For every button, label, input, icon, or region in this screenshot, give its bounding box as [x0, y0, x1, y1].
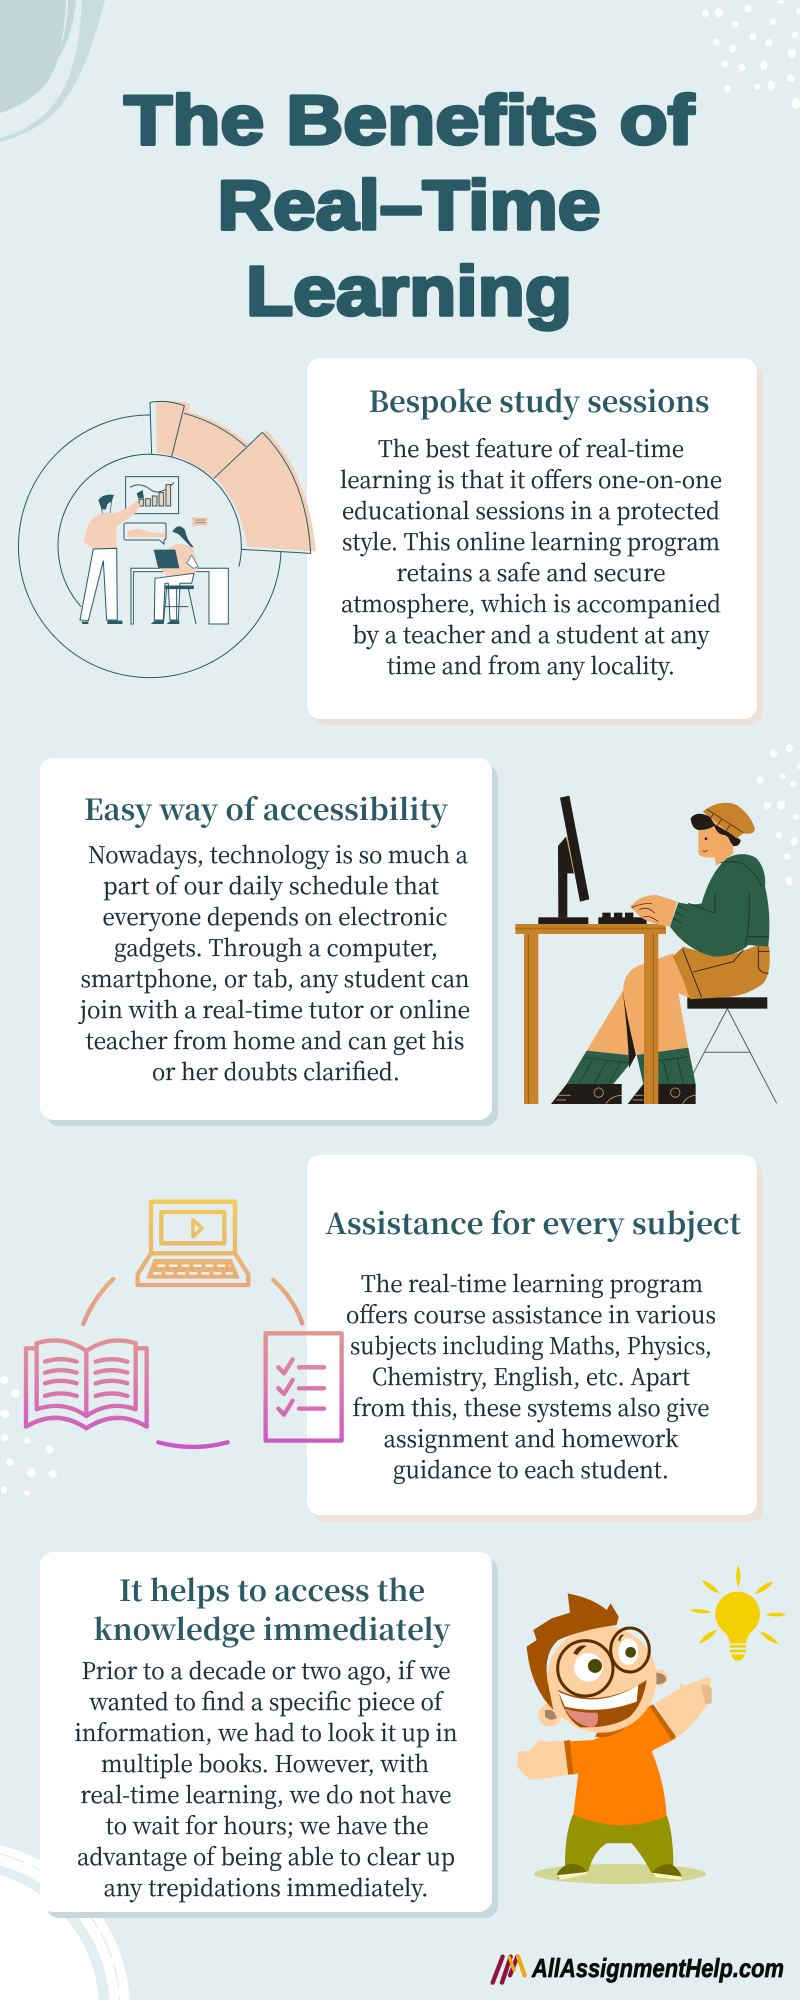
body text: [346, 1266, 716, 1485]
body text: subjects including Maths, Physics,: [350, 1328, 712, 1361]
legs: [551, 953, 696, 1104]
body text: Chemistry, English, etc. Apart: [372, 1359, 691, 1392]
body text: learning is that it offers one-on-one: [340, 462, 722, 495]
body text: to wait for hours; we have the: [106, 1808, 428, 1841]
body text: [74, 1653, 458, 1903]
body text: teacher from home and can get his: [86, 1023, 464, 1056]
heading: [94, 1569, 451, 1649]
monitor and keyboard: [538, 796, 647, 924]
body text: atmosphere, which is accompanied: [341, 586, 721, 619]
title: [124, 81, 695, 330]
body text: guidance to each student.: [393, 1452, 669, 1485]
logo: AllAssignmentHelp.com: [493, 1953, 784, 1983]
body text: smartphone, or tab, any student can: [80, 961, 470, 994]
ground shadow: [534, 1864, 706, 1884]
speech bubble and chart: [124, 517, 207, 544]
body text: The real-time learning program: [361, 1266, 703, 1299]
title: Learning: [246, 252, 572, 330]
logo mark: [493, 1957, 525, 1983]
body text: The best feature of real-time: [378, 431, 684, 464]
woman with laptop: [151, 526, 198, 624]
body text: everyone depends on electronic: [102, 899, 448, 932]
body text: advantage of being able to clear up: [77, 1839, 455, 1872]
illustration: student at computer: [515, 796, 777, 1104]
heading: Bespoke study sessions: [368, 380, 710, 421]
body text: [78, 837, 470, 1087]
body text: any trepidations immediately.: [104, 1870, 428, 1903]
heading: Assistance for every subject: [325, 1202, 742, 1243]
panel: assistance for every subject: [307, 1155, 763, 1522]
chart board: [126, 477, 179, 514]
shirt: [564, 1704, 676, 1825]
body text: information, we had to look it up in: [74, 1715, 458, 1748]
arrows: cycle arcs: [83, 1279, 302, 1447]
body text: offers course assistance in various: [346, 1297, 716, 1330]
illustration: learning cycle icons: [26, 1202, 342, 1447]
illustration: happy boy with light bulb: [517, 1565, 787, 1884]
panel: bespoke study sessions: [307, 358, 763, 725]
glasses and eyes: [558, 1628, 649, 1696]
body text: real-time learning, we do not have: [80, 1777, 452, 1810]
title: Real–Time: [218, 166, 600, 244]
body text: Prior to a decade or two ago, if we: [82, 1653, 450, 1686]
panel: access the knowledge immediately: [40, 1552, 498, 1918]
body text: by a teacher and a student at any: [352, 617, 710, 650]
head and hair: [527, 1593, 667, 1743]
head, hair and beanie: [691, 803, 755, 866]
icon: laptop: [138, 1202, 248, 1285]
icon: light bulb: [689, 1565, 787, 1661]
decoration: bottom-left white brush circle: [0, 1845, 130, 2000]
ears: [538, 1669, 668, 1727]
mouth: [558, 1680, 647, 1727]
body text: from this, these systems also give: [352, 1390, 710, 1423]
body text: part of our daily schedule that: [103, 868, 440, 901]
body text: style. This online learning program: [342, 524, 720, 557]
man: [80, 490, 144, 624]
icon: open book: [26, 1340, 147, 1428]
body text: time and from any locality.: [387, 648, 675, 681]
body text: Nowadays, technology is so much a: [88, 837, 468, 870]
heading: Easy way of accessibility: [84, 788, 448, 829]
hoodie and hand: [630, 854, 769, 957]
illustration: people with charts in a ring: [18, 401, 316, 678]
arms: [517, 1677, 712, 1780]
shorts: [673, 945, 770, 999]
heading: knowledge immediately: [94, 1608, 451, 1649]
trousers and shoes: [557, 1815, 682, 1880]
decoration: left white dots: [0, 1376, 57, 1496]
body text: multiple books. However, with: [101, 1746, 429, 1779]
desk: [515, 924, 666, 1104]
heading: It helps to access the: [119, 1569, 425, 1610]
decoration: middle-right white dots: [756, 745, 800, 885]
panel: easy way of accessibility: [40, 758, 498, 1126]
body text: gadgets. Through a computer,: [114, 930, 438, 963]
decoration: top-right white dots: [702, 0, 800, 109]
stool: [687, 997, 777, 1103]
body text: assignment and homework: [384, 1421, 679, 1454]
desk: [131, 568, 228, 624]
body text: [340, 431, 722, 681]
body text: or her doubts clarified.: [152, 1054, 400, 1087]
body text: educational sessions in a protected: [342, 493, 720, 526]
icon: checklist: [266, 1333, 342, 1441]
title: The Benefits of: [124, 81, 695, 159]
body text: join with a real-time tutor or online: [78, 992, 470, 1025]
decoration: top-left brush circle: [0, 0, 105, 142]
body text: retains a safe and secure: [396, 555, 666, 588]
body text: wanted to find a specific piece of: [89, 1684, 444, 1717]
